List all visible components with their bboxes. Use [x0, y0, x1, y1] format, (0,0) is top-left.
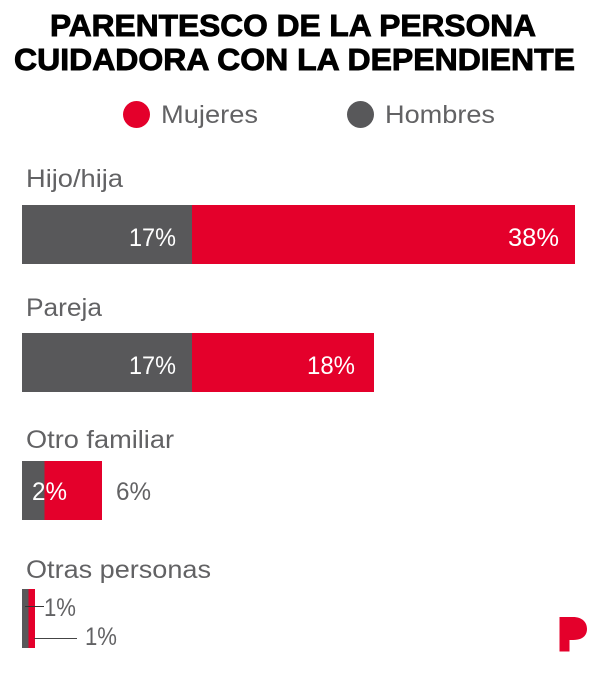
chart row: Hijo/hija: 17%	[129, 224, 176, 252]
chart row: Otro familiar: 6%	[116, 478, 151, 506]
legend	[123, 101, 495, 129]
title	[14, 8, 575, 77]
chart row: Otro familiar	[22, 426, 174, 520]
chart row: Hijo/hija: Hijo/hija	[26, 165, 123, 193]
chart row: Pareja: 17%	[129, 352, 176, 380]
title: CUIDADORA CON LA DEPENDIENTE	[14, 42, 575, 77]
chart row: Pareja: 18%	[307, 352, 355, 380]
chart row: Otro familiar: 2%	[32, 478, 67, 506]
chart row: Otras personas: 1%	[44, 594, 76, 622]
title: PARENTESCO DE LA PERSONA	[50, 8, 536, 43]
chart row: Otras personas	[22, 556, 211, 651]
chart row: Otras personas: Otras personas	[26, 556, 211, 584]
legend: Hombres	[385, 101, 495, 129]
chart row: Otro familiar: Otro familiar	[26, 426, 174, 454]
chart row: Hijo/hija: 38%	[508, 224, 559, 252]
legend: Mujeres	[161, 101, 258, 129]
chart row: Pareja	[22, 294, 374, 392]
chart row: Pareja: Pareja	[26, 294, 102, 322]
chart row: Hijo/hija	[22, 165, 575, 264]
chart row: Otras personas: 1%	[85, 623, 117, 651]
icon: P logo	[560, 617, 587, 652]
